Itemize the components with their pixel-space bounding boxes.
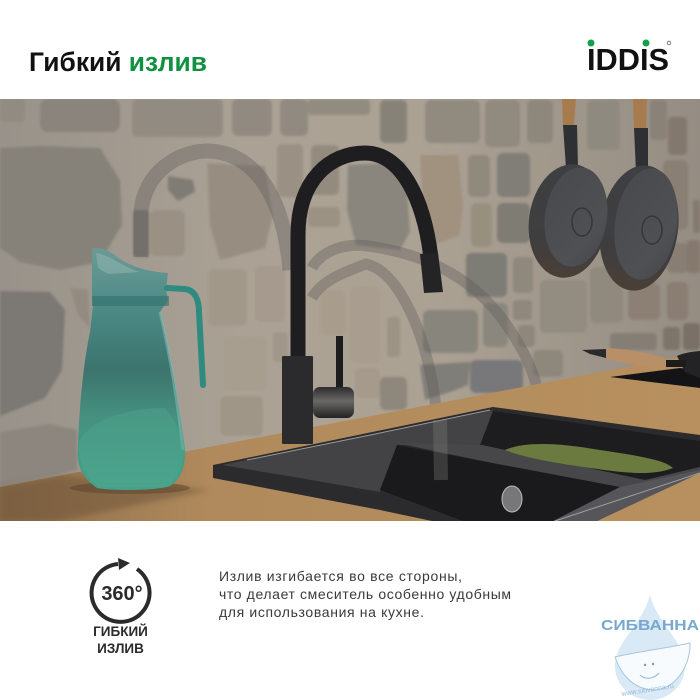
pans (528, 99, 679, 291)
watermark: Sibvanna: www.sibvanna.ru (620, 683, 675, 698)
watermark: Sibvanna (601, 595, 699, 700)
icon caption (93, 624, 148, 656)
title: Гибкий излив (29, 47, 207, 77)
lever (336, 336, 343, 388)
pan with wooden handle and cooktop (582, 348, 700, 388)
spout head (420, 253, 443, 293)
stone wall (0, 99, 700, 499)
drain (502, 486, 522, 512)
icon: 360 degrees rotation (92, 558, 150, 622)
right basin (480, 411, 700, 480)
icon: 360 degrees rotation: 360° (101, 583, 143, 605)
faucet (282, 153, 443, 444)
pan 1 (528, 99, 608, 278)
sink (213, 407, 700, 521)
description text (219, 568, 511, 620)
pan 2 (600, 99, 679, 291)
ghost spout positions (134, 144, 542, 405)
jug handle (167, 288, 203, 385)
mixer (313, 387, 354, 418)
icon caption: ГИБКИЙ (93, 624, 148, 639)
description text: Излив изгибается во все стороны, (219, 568, 462, 584)
countertop (0, 353, 700, 521)
divider rim (407, 445, 700, 487)
spout (298, 153, 431, 358)
description text: что делает смеситель особенно удобным (219, 586, 511, 602)
photo: kitchen sink with flexible spout (0, 99, 700, 521)
faucet body (282, 356, 313, 444)
left basin (380, 445, 620, 521)
description text: для использования на кухне. (219, 604, 424, 620)
icon caption: ИЗЛИВ (97, 641, 144, 656)
jug (70, 248, 203, 494)
watermark: Sibvanna: СИБВАННА (601, 617, 699, 634)
logo: IDDIS: IDDIS (587, 42, 669, 77)
shadows on countertop (0, 476, 210, 521)
zucchini (505, 444, 673, 473)
ghost spout over sink (440, 420, 441, 480)
